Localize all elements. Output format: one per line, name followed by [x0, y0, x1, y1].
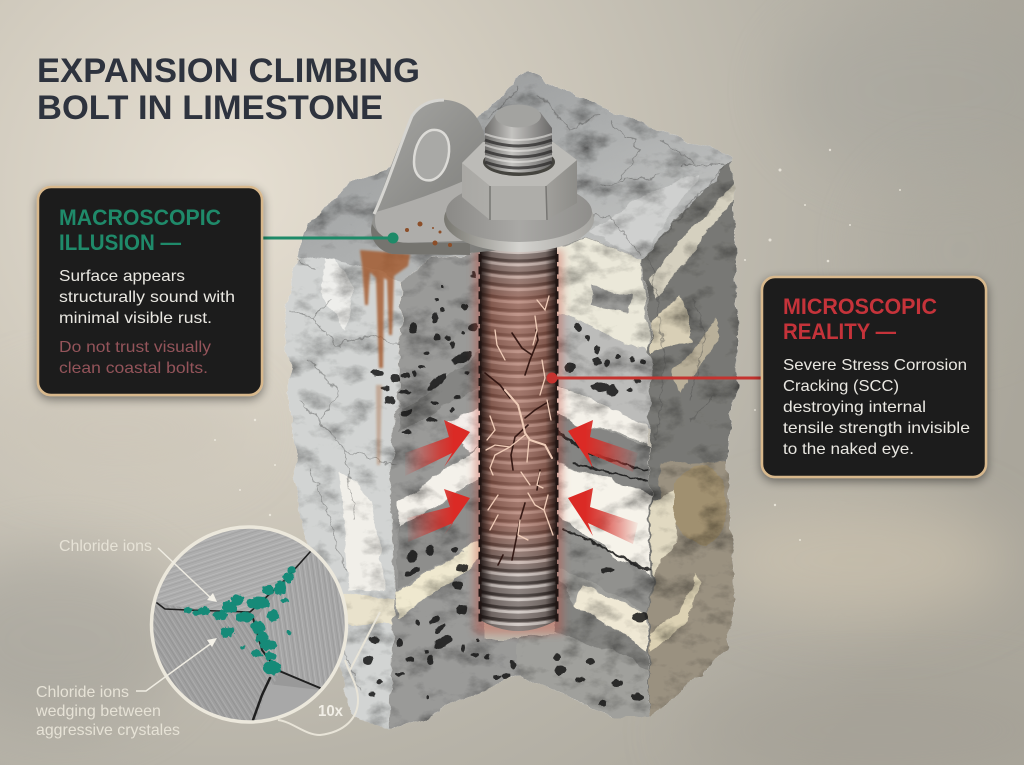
SCC cracks: dark [485, 330, 548, 565]
rust streaks [360, 250, 410, 465]
title: BOLT IN LIMESTONE [37, 89, 383, 127]
panel heading [783, 294, 937, 344]
panel heading: MICROSCOPIC [783, 294, 937, 319]
panel body text [783, 357, 970, 458]
metal crystal grains [153, 528, 345, 720]
warning text: clean coastal bolts. [59, 360, 208, 377]
hanger hole [414, 130, 449, 180]
arrow lower right [568, 488, 638, 544]
panel body text: to the naked eye. [783, 441, 914, 458]
SCC cracks: bright [486, 296, 553, 540]
callout: chloride ions wedging: wedging between [35, 703, 161, 720]
left inner face [388, 254, 518, 740]
threaded bolt shaft [474, 246, 563, 638]
panel body text [59, 268, 235, 327]
limestone veins and ridges [290, 85, 725, 690]
hex nut [462, 142, 577, 220]
plate edge [371, 224, 470, 255]
cracks [157, 552, 320, 720]
arrow upper left [405, 420, 470, 476]
limestone pores [363, 272, 650, 706]
panel body text: Surface appears [59, 268, 185, 285]
washer [444, 182, 594, 252]
panel body text: Cracking (SCC) [783, 378, 899, 395]
red compression arrows [405, 420, 638, 544]
callout: chloride ions wedging [35, 638, 217, 739]
panel body text: structurally sound with [59, 289, 235, 306]
callout: chloride ions wedging: aggressive crystales [36, 722, 180, 739]
callout: chloride ions: Chloride ions [59, 538, 152, 555]
panel body text: minimal visible rust. [59, 310, 212, 327]
panel heading: REALITY — [783, 319, 896, 344]
warning text: Do not trust visually [59, 339, 211, 356]
lens ring [152, 527, 346, 722]
panel: macroscopic illusion [38, 187, 262, 395]
right outer face [640, 157, 745, 725]
lens tail to rock [278, 612, 380, 735]
panel body text: tensile strength invisible [783, 420, 970, 437]
callout: chloride ions wedging: Chloride ions [36, 684, 129, 701]
panel: microscopic reality [762, 277, 986, 477]
green leader line [262, 232, 398, 244]
panel heading: MACROSCOPIC [59, 205, 221, 230]
panel heading: ILLUSION — [59, 230, 181, 255]
warning text [59, 339, 211, 377]
threaded stud top [485, 104, 552, 172]
panel body text: destroying internal [783, 399, 926, 416]
chloride crystals [184, 566, 296, 675]
top face [296, 72, 740, 280]
title [37, 52, 420, 127]
panel heading [59, 205, 221, 255]
red leader line [546, 372, 761, 384]
magnified inset [150, 520, 380, 735]
steel hanger plate [371, 100, 520, 255]
arrow lower left [407, 489, 470, 542]
limestone block [270, 72, 745, 740]
arrow upper right [568, 420, 638, 472]
title: EXPANSION CLIMBING [37, 52, 420, 90]
right inner face [518, 237, 650, 725]
callout: chloride ions [59, 538, 217, 602]
lower bent plate [375, 178, 500, 243]
panel body text: Severe Stress Corrosion [783, 357, 967, 374]
magnification label: 10x [318, 703, 343, 720]
left outer face [284, 250, 404, 730]
